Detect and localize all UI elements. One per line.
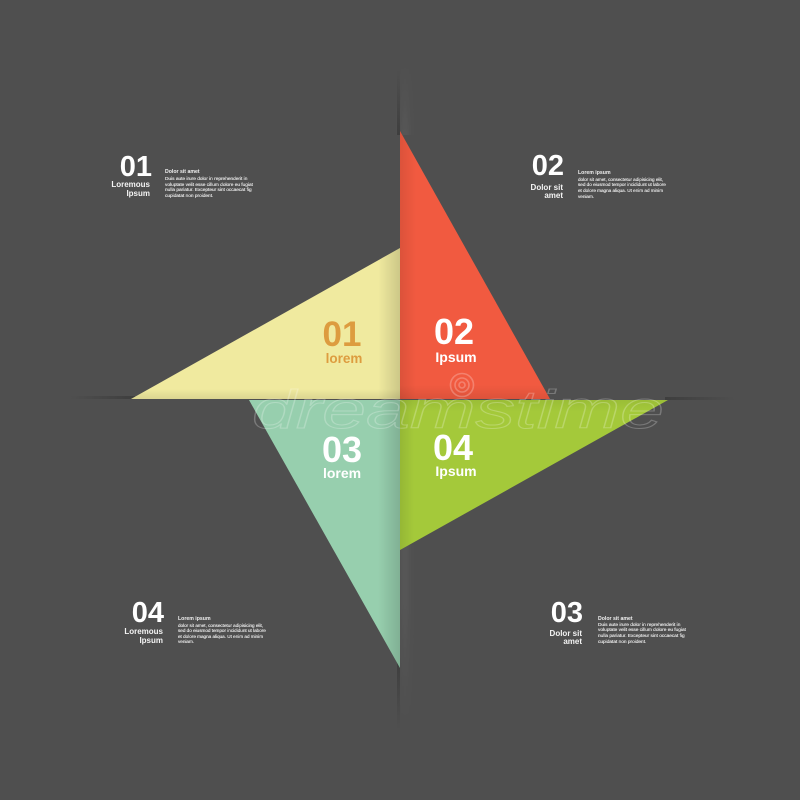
text block: 01 top left: nulla pariatur. Excepteur sint occaecat fig xyxy=(165,187,252,193)
label: green triangle 04 Ipsum: 04 xyxy=(433,427,473,468)
text block: 03 bottom right: amet xyxy=(563,637,582,646)
text block: 04 bottom left: Lorem ipsum xyxy=(178,616,211,622)
text block: 01 top left: Ipsum xyxy=(126,189,150,198)
text block: 02 top right: Lorem ipsum xyxy=(578,170,611,176)
text block: 04 bottom left: 04 xyxy=(132,597,164,629)
watermark xyxy=(252,374,664,440)
text block: 02 top right xyxy=(531,150,666,200)
text block: 03 bottom right: cupidatat non proident. xyxy=(598,639,646,645)
text block: 01 top left: voluptate velit esse cillum dolore eu fugiat xyxy=(165,182,254,188)
text block: 01 top left: Dolor sit amet xyxy=(165,169,200,175)
text block: 03 bottom right: voluptate velit esse cillum dolore eu fugiat xyxy=(598,627,687,633)
label: yellow triangle 01 lorem: lorem xyxy=(326,351,362,366)
text block: 04 bottom left: veniam. xyxy=(178,639,194,644)
text block: 03 bottom right: Duis aute irure dolor in reprehenderit in xyxy=(598,622,681,628)
label: teal triangle 03 lorem: 03 xyxy=(322,429,362,470)
triangle: green 04 xyxy=(400,400,668,550)
label: red triangle 02 Ipsum: 02 xyxy=(434,311,474,352)
label: yellow triangle 01 lorem: 01 xyxy=(323,315,361,354)
text block: 04 bottom left: Ipsum xyxy=(139,636,163,645)
text block: 02 top right: Dolor sit xyxy=(531,183,563,192)
triangle: red 02 xyxy=(400,131,550,399)
text block: 01 top left: 01 xyxy=(120,151,152,183)
label: red triangle 02 Ipsum: Ipsum xyxy=(435,349,477,365)
triangle: teal 03 xyxy=(245,395,405,675)
label: green triangle 04 Ipsum: Ipsum xyxy=(435,463,477,479)
text block: 02 top right: dolor sit amet, consectetur adipisicing elit, xyxy=(578,177,663,182)
text block: 03 bottom right xyxy=(550,597,687,646)
text block: 01 top left: Loremous xyxy=(111,180,151,189)
text block: 03 bottom right: nulla pariatur. Excepteur sint occaecat fig xyxy=(598,633,685,639)
text block: 04 bottom left: et dolore magna aliqua. Ut enim ad minim xyxy=(178,634,263,639)
text block: 04 bottom left xyxy=(124,597,266,645)
text block: 02 top right: et dolore magna aliqua. Ut enim ad minim xyxy=(578,188,663,193)
text block: 02 top right: 02 xyxy=(532,150,564,182)
text block: 02 top right: veniam. xyxy=(578,194,594,199)
text block: 04 bottom left: sed do eiusmod tempor incididunt ut labore xyxy=(178,628,266,633)
text block: 03 bottom right: Dolor sit xyxy=(550,629,582,638)
icon: watermark spiral xyxy=(450,374,474,396)
text block: 04 bottom left: dolor sit amet, consectetur adipisicing elit, xyxy=(178,623,263,628)
text block: 02 top right: amet xyxy=(544,191,563,200)
triangle: yellow 01 xyxy=(131,248,400,399)
text block: 04 bottom left: Loremous xyxy=(124,627,164,636)
text block: 01 top left: Duis aute irure dolor in reprehenderit in xyxy=(165,176,248,182)
text block: 03 bottom right: Dolor sit amet xyxy=(598,616,633,622)
text block: 03 bottom right: 03 xyxy=(551,597,583,629)
watermark: dreamstime xyxy=(252,380,664,440)
text block: 01 top left: cupidatat non proident. xyxy=(165,193,213,199)
text block: 02 top right: sed do eiusmod tempor incididunt ut labore xyxy=(578,182,666,187)
text block: 01 top left xyxy=(111,151,254,199)
label: teal triangle 03 lorem: lorem xyxy=(323,465,361,481)
